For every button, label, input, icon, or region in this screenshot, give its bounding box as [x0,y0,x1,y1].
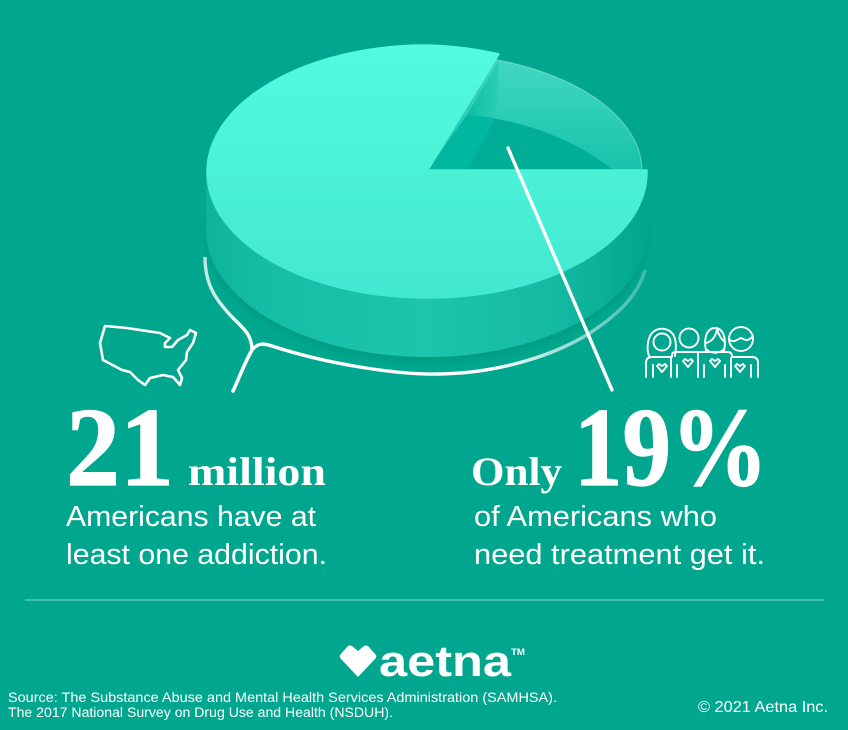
logo: aetna: aetna [379,637,512,686]
logo: aetna: TM [511,647,525,657]
source note: The 2017 National Survey on Drug Use and Health (NSDUH). [8,704,393,720]
icon: USA map [100,326,196,385]
source note [8,689,557,720]
text: of Americans who need treatment get it [474,501,765,571]
pie chart [205,45,648,391]
copyright: © 2021 Aetna Inc. [698,699,828,716]
text: Americans have at least one addiction: Americans have at [66,501,316,533]
callout ring: left branch and base rim [205,257,645,391]
text: Americans have at least one addiction: least one addiction. [66,539,327,571]
cut-out slice [430,59,642,170]
text: of Americans who need treatment get it: need treatment get it. [474,539,765,571]
stat: only 19%: 19% [574,386,768,510]
pointer line to 19% [508,148,612,390]
stat: only 19% [471,386,768,510]
pie side wall [206,172,648,357]
pie shadow [207,111,647,361]
stat: 21 million: million [188,449,326,494]
text: Americans have at least one addiction [66,501,327,571]
stat: 21 million: 21 [66,386,174,510]
stat: 21 million [66,386,326,510]
stat: only 19%: Only [471,449,562,494]
text: of Americans who need treatment get it: of Americans who [474,501,717,533]
source note: Source: The Substance Abuse and Mental Health Services Administration (SAMHSA). [8,689,557,705]
pie top surface [207,45,647,298]
icon: heart [340,646,376,677]
logo: aetna [340,637,525,686]
icon: four people with hearts [646,327,758,377]
